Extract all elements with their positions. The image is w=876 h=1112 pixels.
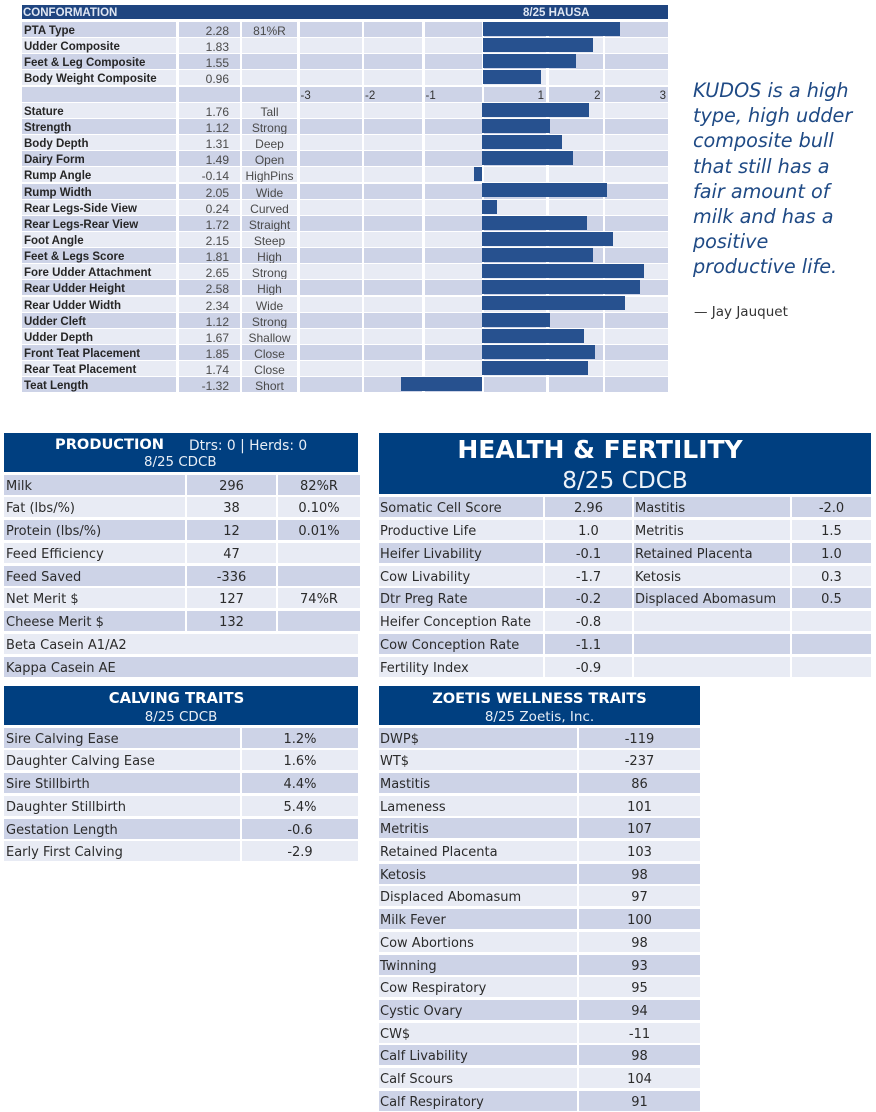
row: Heifer Livability / Retained Placenta: [379, 543, 871, 563]
zoetis header: [379, 686, 700, 725]
quote: breeder comment: that still has a: [693, 155, 829, 178]
row: Early First Calving: -2.9: [287, 845, 313, 860]
panel: conformation table: [22, 5, 668, 392]
row: axis scale: -2: [365, 90, 375, 102]
panel: zoetis wellness traits: [379, 686, 700, 1112]
row: Sire Calving Ease: 1.2%: [283, 732, 317, 746]
row: Productive Life / Metritis: Metritis: [635, 524, 684, 539]
row: Sire Calving Ease: Sire Calving Ease: [6, 732, 119, 746]
row: Fertility Index: -0.9: [576, 661, 601, 676]
row: Protein: 12: [223, 524, 240, 539]
row: Foot Angle: [22, 232, 668, 247]
quote: breeder comment: type, high udder: [693, 104, 852, 127]
row: Cow Livability / Ketosis: 0.3: [821, 570, 842, 585]
row: Heifer Livability / Retained Placenta: 1.0: [821, 547, 842, 562]
row: Early First Calving: [4, 841, 358, 861]
row: Retained Placenta: Retained Placenta: [380, 845, 498, 860]
quote: breeder comment: milk and has a: [693, 205, 834, 228]
row: Rear Udder Height: Rear Udder Height: [24, 283, 125, 295]
row: Sire Stillbirth: Sire Stillbirth: [6, 777, 90, 792]
row: Fat: 38: [223, 501, 240, 516]
row: Rear Udder Width: Rear Udder Width: [24, 300, 121, 312]
row: Rear Teat Placement: Rear Teat Placement: [24, 364, 136, 376]
health and fertility header: [379, 433, 871, 494]
row: Ketosis: Ketosis: [380, 868, 426, 883]
row: CW$: -11: [629, 1027, 650, 1042]
row: Metritis: Metritis: [380, 822, 429, 837]
row: Gestation Length: Gestation Length: [6, 822, 118, 838]
row: Gestation Length: [4, 818, 358, 838]
row: Sire Stillbirth: [4, 773, 358, 793]
row: Calf Scours: [379, 1068, 700, 1088]
row: Cheese Merit: [4, 611, 360, 631]
quote: breeder comment: positive: [693, 230, 768, 253]
row: Feet & Leg Composite: [22, 54, 668, 69]
row: Teat Length: [22, 377, 668, 392]
row: Teat Length: Teat Length: [24, 380, 88, 392]
row: Mastitis: [379, 773, 700, 793]
row: Front Teat Placement: Front Teat Placement: [24, 348, 140, 360]
panel: health and fertility: [379, 433, 871, 677]
row: Fat: [4, 497, 360, 517]
row: Daughter Stillbirth: Daughter Stillbirth: [6, 800, 126, 815]
row: Twinning: [379, 954, 700, 974]
row: Gestation Length: -0.6: [287, 822, 313, 838]
row: Net Merit: 127: [219, 592, 244, 607]
row: Milk Fever: Milk Fever: [380, 913, 446, 928]
row: Milk: 82%R: [300, 478, 338, 494]
row: Cow Abortions: Cow Abortions: [380, 936, 474, 951]
row: CW$: [379, 1023, 700, 1043]
row: Somatic Cell Score / Mastitis: -2.0: [819, 501, 844, 516]
health and fertility header: HEALTH & FERTILITY: [457, 435, 743, 464]
row: Calf Respiratory: [379, 1091, 700, 1111]
row: PTA Type: PTA Type: [24, 25, 75, 37]
calving traits header: 8/25 CDCB: [145, 710, 217, 725]
row: Strength: Strength: [24, 122, 71, 134]
row: Dtr Preg Rate / Displaced Abomasum: Dtr Preg Rate: [380, 592, 467, 607]
row: Rear Udder Height: [22, 280, 668, 295]
row: Feed Saved: [4, 566, 360, 586]
row: Cow Respiratory: Cow Respiratory: [380, 981, 486, 996]
panel: calving traits: [4, 686, 358, 862]
row: Strength: [22, 119, 668, 134]
row: Lameness: 101: [627, 800, 652, 815]
row: Protein: 0.01%: [298, 524, 340, 539]
row: Lameness: Lameness: [380, 800, 446, 815]
row: Cystic Ovary: 94: [631, 1004, 648, 1019]
row: Cow Abortions: [379, 932, 700, 952]
zoetis header: ZOETIS WELLNESS TRAITS: [432, 690, 647, 707]
row: Feed Efficiency: Feed Efficiency: [6, 547, 104, 562]
row: DWP$: -119: [625, 732, 654, 746]
row: Calf Respiratory: Calf Respiratory: [380, 1095, 484, 1110]
row: Rear Legs-Rear View: [22, 216, 668, 231]
row: Twinning: 93: [631, 958, 648, 974]
row: Daughter Calving Ease: Daughter Calving Ease: [6, 754, 155, 769]
row: Milk Fever: [379, 909, 700, 929]
conformation header: CONFORMATION: [23, 7, 117, 19]
row: Protein: Protein (lbs/%): [6, 524, 101, 539]
row: Cow Conception Rate: [379, 634, 871, 654]
row: DWP$: DWP$: [380, 732, 419, 746]
row: Feed Efficiency: 47: [223, 547, 240, 562]
row: Feet & Leg Composite: Feet & Leg Composite: [24, 57, 145, 69]
row: Heifer Conception Rate: Heifer Conception Rate: [380, 615, 531, 630]
row: Dtr Preg Rate / Displaced Abomasum: -0.2: [576, 592, 601, 607]
row: Cow Livability / Ketosis: Ketosis: [635, 570, 681, 585]
row: Cow Respiratory: [379, 977, 700, 997]
row: Rear Teat Placement: [22, 361, 668, 376]
quote: breeder comment: productive life.: [693, 255, 837, 278]
row: axis scale: -1: [426, 90, 436, 102]
row: Cow Conception Rate: Cow Conception Rate: [380, 638, 519, 653]
row: Somatic Cell Score / Mastitis: 2.96: [574, 501, 603, 516]
row: Dtr Preg Rate / Displaced Abomasum: [379, 588, 871, 608]
row: axis scale: 3: [660, 90, 666, 102]
row: Feet & Legs Score: Feet & Legs Score: [24, 251, 124, 263]
row: Daughter Calving Ease: 1.6%: [283, 754, 317, 769]
row: WT$: WT$: [380, 754, 409, 769]
row: Dairy Form: [22, 151, 668, 166]
conformation header: 8/25 HAUSA: [523, 7, 589, 19]
row: Body Depth: Body Depth: [24, 138, 89, 150]
production header: Dtrs: 0 | Herds: 0: [189, 438, 307, 454]
row: Metritis: [379, 818, 700, 838]
row: Displaced Abomasum: 97: [631, 890, 648, 905]
row: Udder Cleft: [22, 313, 668, 328]
row: Mastitis: Mastitis: [380, 777, 430, 792]
row: Udder Composite: Udder Composite: [24, 41, 120, 53]
row: Sire Stillbirth: 4.4%: [283, 777, 317, 792]
row: Rear Udder Width: [22, 297, 668, 312]
row: Cow Abortions: 98: [631, 936, 648, 951]
row: Milk: 296: [219, 478, 244, 494]
production header: PRODUCTION: [55, 436, 164, 453]
row: Fore Udder Attachment: Fore Udder Attachment: [24, 267, 151, 279]
panel: production: [4, 433, 360, 677]
row: Daughter Stillbirth: [4, 796, 358, 816]
row: Productive Life / Metritis: Productive Life: [380, 524, 476, 539]
row: WT$: -237: [625, 754, 654, 769]
row: Net Merit: Net Merit $: [6, 592, 79, 607]
row: Somatic Cell Score / Mastitis: Somatic Cell Score: [380, 501, 502, 516]
row: Retained Placenta: 103: [627, 845, 652, 860]
row: Net Merit: [4, 588, 360, 608]
row: Ketosis: [379, 864, 700, 884]
row: Heifer Conception Rate: [379, 611, 871, 631]
row: Daughter Calving Ease: [4, 750, 358, 770]
row: Beta Casein: Beta Casein A1/A2: [6, 638, 127, 653]
row: Udder Depth: [22, 329, 668, 344]
row: Somatic Cell Score / Mastitis: [379, 497, 871, 517]
row: Protein: [4, 520, 360, 540]
row: Productive Life / Metritis: [379, 520, 871, 540]
row: Calf Livability: 98: [631, 1049, 648, 1064]
row: Fore Udder Attachment: [22, 264, 668, 279]
calving traits header: [4, 686, 358, 725]
row: Sire Calving Ease: [4, 728, 358, 748]
row: Feed Saved: Feed Saved: [6, 570, 81, 584]
quote: breeder comment: fair amount of: [693, 180, 829, 203]
row: Rump Width: [22, 184, 668, 199]
row: DWP$: [379, 728, 700, 748]
row: Mastitis: 86: [631, 777, 648, 792]
row: Milk: Milk: [6, 478, 32, 494]
row: Udder Cleft: Udder Cleft: [24, 316, 86, 328]
row: Dtr Preg Rate / Displaced Abomasum: Displaced Abomasum: [635, 592, 776, 607]
row: Rump Angle: [22, 167, 668, 182]
row: Kappa Casein: Kappa Casein AE: [6, 660, 116, 676]
row: Ketosis: 98: [631, 868, 648, 883]
row: Cow Livability / Ketosis: [379, 566, 871, 586]
row: Cheese Merit: 132: [219, 615, 244, 630]
row: WT$: [379, 750, 700, 770]
row: Calf Livability: Calf Livability: [380, 1049, 468, 1064]
row: Twinning: Twinning: [380, 958, 437, 974]
bar chart: conformation traits: [401, 22, 644, 391]
row: Dairy Form: Dairy Form: [24, 154, 85, 166]
row: Stature: [22, 103, 668, 118]
row: Body Depth: [22, 135, 668, 150]
row: Cystic Ovary: [379, 1000, 700, 1020]
row: Cheese Merit: Cheese Merit $: [6, 615, 104, 630]
row: Heifer Livability / Retained Placenta: -0.1: [576, 547, 601, 562]
row: Metritis: 107: [627, 822, 652, 837]
row: Feed Saved: -336: [217, 570, 246, 584]
health and fertility header: 8/25 CDCB: [562, 467, 688, 494]
row: Rump Angle: Rump Angle: [24, 170, 91, 182]
zoetis header: 8/25 Zoetis, Inc.: [485, 709, 594, 725]
row: Cow Respiratory: 95: [631, 981, 648, 996]
row: Cystic Ovary: Cystic Ovary: [380, 1004, 462, 1019]
row: Fertility Index: [379, 657, 871, 677]
row: Fertility Index: Fertility Index: [380, 661, 469, 676]
row: Net Merit: 74%R: [300, 592, 338, 607]
row: Calf Scours: 104: [627, 1072, 652, 1087]
row: Feet & Legs Score: [22, 248, 668, 263]
row: Calf Respiratory: 91: [631, 1095, 648, 1110]
row: Heifer Conception Rate: -0.8: [576, 615, 601, 630]
row: axis scale: -3: [300, 90, 311, 102]
row: axis scale: 2: [594, 90, 600, 102]
row: Milk: [4, 475, 360, 495]
row: Milk Fever: 100: [627, 913, 652, 928]
row: Heifer Livability / Retained Placenta: Heifer Livability: [380, 547, 482, 562]
row: Body Weight Composite: Body Weight Composite: [24, 73, 157, 85]
calving traits header: CALVING TRAITS: [109, 690, 244, 707]
quote: breeder comment: KUDOS is a high: [693, 79, 849, 102]
row: Fat: Fat (lbs/%): [6, 501, 75, 516]
row: Foot Angle: Foot Angle: [24, 235, 84, 247]
row: Early First Calving: Early First Calving: [6, 845, 123, 860]
row: Heifer Livability / Retained Placenta: Retained Placenta: [635, 547, 753, 562]
row: Udder Depth: Udder Depth: [24, 332, 93, 344]
row: Cow Livability / Ketosis: -1.7: [576, 570, 601, 585]
quote: breeder comment: [693, 79, 854, 278]
row: axis scale: 1: [538, 90, 544, 102]
row: Displaced Abomasum: Displaced Abomasum: [380, 890, 521, 905]
quote: breeder comment: composite bull: [693, 129, 834, 152]
conformation header: [22, 5, 668, 19]
row: Dtr Preg Rate / Displaced Abomasum: 0.5: [821, 592, 842, 607]
row: PTA Type: [22, 22, 668, 37]
row: Cow Livability / Ketosis: Cow Livability: [380, 570, 470, 585]
row: Rear Legs-Side View: [22, 200, 668, 215]
production header: [4, 433, 358, 472]
attribution: — Jay Jauquet: [694, 304, 788, 320]
row: Rear Legs-Rear View: Rear Legs-Rear View: [24, 219, 138, 231]
row: Calf Scours: Calf Scours: [380, 1072, 453, 1087]
row: Fat: 0.10%: [298, 501, 340, 516]
row: axis scale: [22, 87, 668, 102]
row: Udder Composite: [22, 38, 668, 53]
row: Displaced Abomasum: [379, 886, 700, 906]
row: Cow Conception Rate: -1.1: [576, 638, 601, 653]
row: Body Weight Composite: [22, 70, 668, 85]
row: Rear Legs-Side View: Rear Legs-Side View: [24, 203, 137, 215]
row: Productive Life / Metritis: 1.5: [821, 524, 842, 539]
row: Calf Livability: [379, 1045, 700, 1065]
row: Somatic Cell Score / Mastitis: Mastitis: [635, 501, 685, 516]
row: Rump Width: Rump Width: [24, 186, 92, 198]
row: CW$: CW$: [380, 1027, 410, 1042]
row: Stature: Stature: [24, 106, 64, 118]
row: Lameness: [379, 796, 700, 816]
row: Front Teat Placement: [22, 345, 668, 360]
row: Daughter Stillbirth: 5.4%: [283, 800, 317, 815]
row: Retained Placenta: [379, 841, 700, 861]
row: Productive Life / Metritis: 1.0: [578, 524, 599, 539]
row: Feed Efficiency: [4, 543, 360, 563]
production header: 8/25 CDCB: [144, 455, 217, 470]
